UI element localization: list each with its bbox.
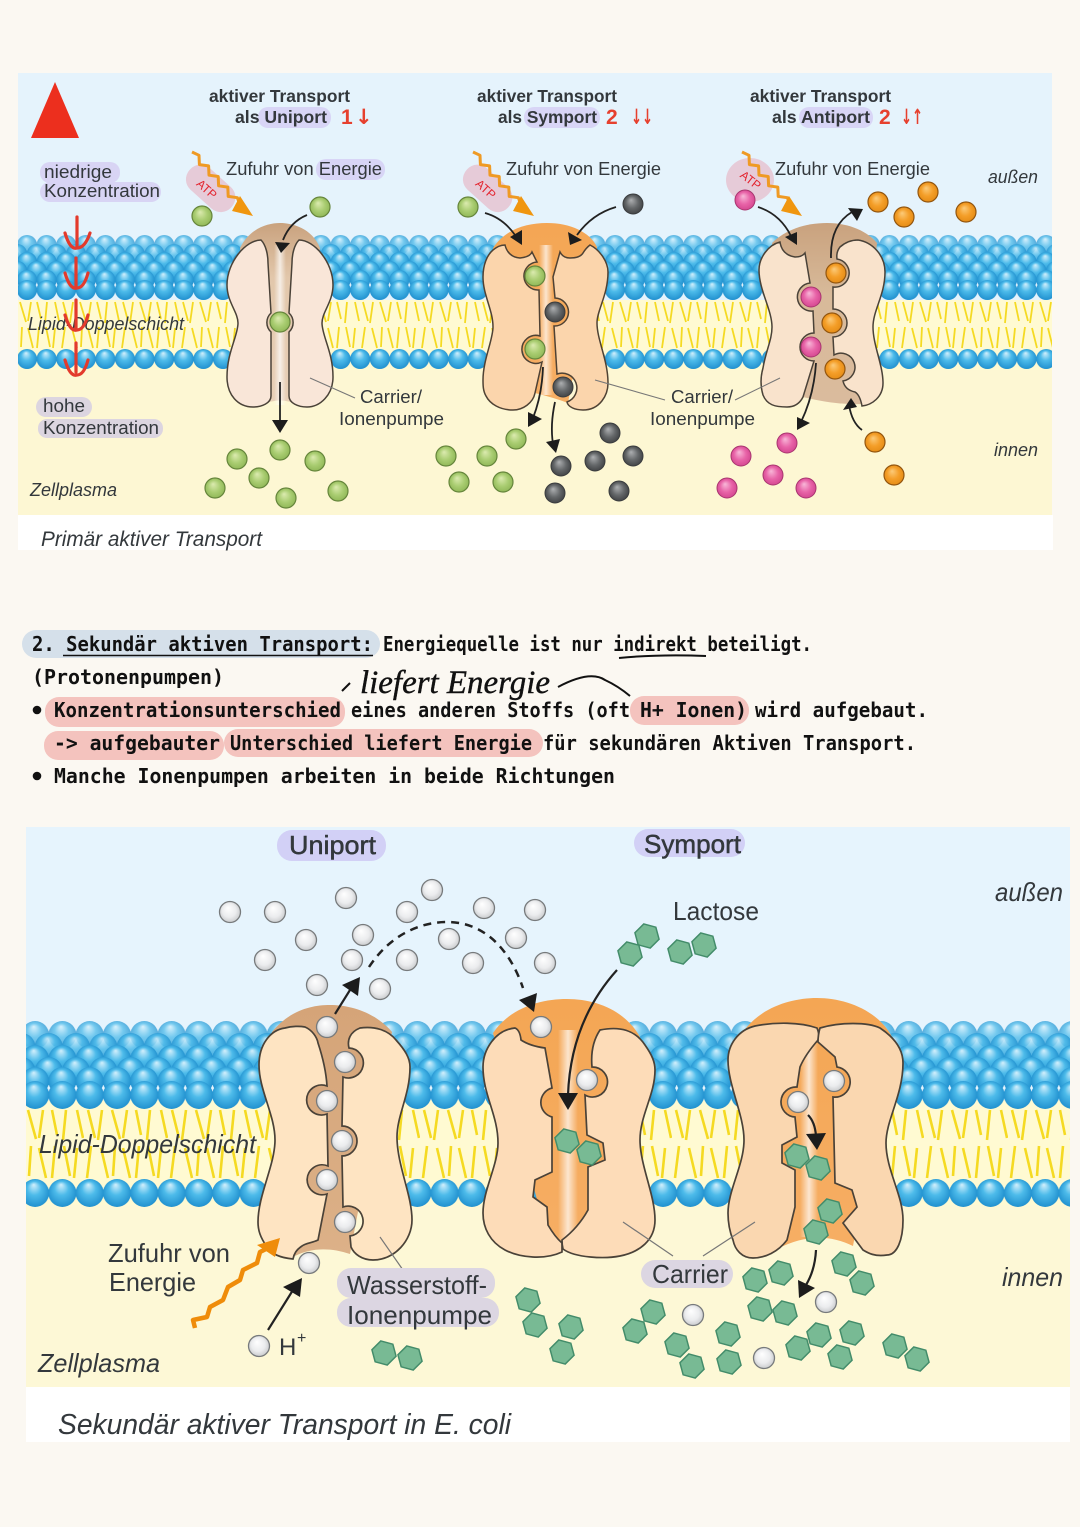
column 3 heading: antiport: als Antiport <box>772 107 870 127</box>
lipid bilayer <box>0 1020 1080 1208</box>
icon: energy squiggle <box>193 1238 280 1328</box>
label: hydrogen ion pump: Ionenpumpe <box>347 1300 492 1330</box>
column 2 heading: symport: 2 <box>606 106 618 129</box>
text: low concentration: niedrige <box>44 162 112 182</box>
label: energy supply 2: Zufuhr von Energie <box>506 159 661 179</box>
label: carrier 2: Ionenpumpe <box>650 409 755 429</box>
extracellular background <box>18 73 1052 303</box>
label: inside: innen <box>994 440 1038 460</box>
text: low concentration: Konzentration <box>44 181 160 201</box>
proton label: + <box>297 1330 306 1347</box>
protein: uniport carrier <box>227 223 333 407</box>
caption background: secondary transport <box>26 1387 1070 1442</box>
icon: ATP energy 1 <box>180 152 253 218</box>
panel: secondary active transport <box>0 827 1080 1442</box>
bullet 1 continuation <box>54 731 916 755</box>
column 1 heading: uniport: aktiver Transport <box>209 86 350 106</box>
bullet 1: wird aufgebaut. <box>755 698 928 722</box>
lactose and protons inside <box>369 1250 932 1380</box>
label: lipid bilayer: Lipid-Doppelschicht <box>28 314 185 334</box>
bullet 1 continuation: für sekundären Aktiven Transport. <box>543 731 916 755</box>
column 3 heading: antiport <box>750 86 923 129</box>
label: energy supply 3: Zufuhr von Energie <box>775 159 930 179</box>
text: high concentration: hohe <box>43 396 85 416</box>
bullet 1 <box>33 698 928 722</box>
label: energy supply: Energie <box>109 1267 196 1297</box>
text block: secondary transport notes <box>22 630 928 788</box>
proton label <box>248 1330 306 1361</box>
column 2 heading: symport: aktiver Transport <box>477 86 617 106</box>
molecules: uniport <box>192 197 348 508</box>
label: lactose: Lactose <box>673 896 759 926</box>
heading: uniport: Uniport <box>289 830 377 860</box>
protein: symport carrier open inward <box>728 998 903 1258</box>
label: energy supply <box>108 1238 230 1297</box>
membrane core background <box>26 1100 1070 1205</box>
bullet 1 continuation: Unterschied liefert Energie <box>230 731 532 755</box>
molecules: symport <box>436 194 643 503</box>
icon: ATP energy 2: ATP <box>473 177 499 202</box>
heading line: 2. Sekundär aktiven Transport: <box>32 632 373 656</box>
icon: ATP energy 3: ATP <box>737 168 764 193</box>
membrane core background <box>18 300 1052 370</box>
label: cytoplasm: Zellplasma <box>29 480 117 500</box>
extracellular background <box>26 827 1070 1107</box>
column 3 heading: antiport: 2 <box>879 106 891 129</box>
cytoplasm background <box>26 1205 1070 1387</box>
column 1 heading: uniport: als Uniport <box>235 107 327 127</box>
label: carrier 1: Ionenpumpe <box>339 409 444 429</box>
molecules: antiport <box>717 182 976 498</box>
column 1 heading: uniport: 1 <box>341 106 353 129</box>
label: outside: außen <box>995 877 1063 907</box>
icon: ATP energy 3 <box>726 152 802 216</box>
column 3 heading: antiport: aktiver Transport <box>750 86 891 106</box>
caption: secondary transport: Sekundär aktiver Transport in E. coli <box>58 1409 513 1441</box>
bullet 2: Manche Ionenpumpen arbeiten in beide Richtungen <box>54 764 615 788</box>
column 2 heading: symport: als Symport <box>498 107 597 127</box>
panel: primary active transport <box>0 73 1080 551</box>
handwritten note: liefert Energie <box>342 665 630 701</box>
label pills: concentration <box>36 162 163 438</box>
text: low concentration <box>44 162 160 201</box>
label: carrier 2 <box>650 387 755 429</box>
cytoplasm background <box>18 370 1052 515</box>
bullet 1 continuation: -> aufgebauter <box>54 731 220 755</box>
protein: symport carrier <box>483 223 608 410</box>
protein: hydrogen ion pump <box>258 1005 412 1274</box>
column 1 heading: uniport: ↓ <box>355 105 373 129</box>
text: high concentration <box>43 396 159 438</box>
leader lines: carrier <box>310 378 780 400</box>
heading line: Energiequelle ist nur indirekt beteiligt. <box>383 632 812 656</box>
column 1 heading: uniport <box>209 86 373 129</box>
heading: symport: Symport <box>644 829 742 859</box>
label: carrier: Carrier <box>652 1259 728 1289</box>
column 2 heading: symport <box>477 86 653 129</box>
bullet 1: eines anderen Stoffs (oft <box>351 698 630 722</box>
protein: uniport-symport carrier open outward <box>483 999 655 1258</box>
icon: ATP energy 1: ATP <box>194 177 220 202</box>
caption: primary transport: Primär aktiver Transport <box>41 528 263 551</box>
proton label: H <box>279 1334 296 1361</box>
icon: ATP energy 2 <box>457 152 534 218</box>
protein: antiport carrier <box>759 223 885 407</box>
label: cytoplasm: Zellplasma <box>37 1348 160 1378</box>
handwritten note: liefert Energie: liefert Energie <box>360 665 550 701</box>
red arrows: concentration gradient <box>65 217 90 375</box>
caption background: primary transport <box>18 515 1053 550</box>
column 3 heading: antiport: ↓↑ <box>901 105 923 129</box>
label: inside: innen <box>1002 1262 1063 1292</box>
label: energy supply: Zufuhr von <box>108 1238 230 1268</box>
proton pumps note: (Protonenpumpen) <box>32 665 224 689</box>
label: outside: außen <box>988 167 1038 187</box>
arrows: proton and lactose paths <box>268 922 826 1330</box>
arrows: transport directions <box>272 207 863 453</box>
label: energy supply 1: Zufuhr von Energie <box>226 159 382 179</box>
label: hydrogen ion pump <box>337 1268 499 1330</box>
icon: red triangle <box>31 82 79 138</box>
protons outside <box>220 880 556 1000</box>
lactose outside <box>615 922 719 968</box>
column 2 heading: symport: ↓↓ <box>631 105 653 129</box>
highlight pills <box>22 630 749 760</box>
bullet 1: H+ Ionen) <box>640 698 747 722</box>
leader lines: pump and carrier <box>380 1222 755 1270</box>
label: hydrogen ion pump: Wasserstoff- <box>347 1270 487 1300</box>
label: carrier 1 <box>339 387 444 429</box>
label: carrier 2: Carrier/ <box>671 387 733 407</box>
text: high concentration: Konzentration <box>43 418 159 438</box>
label: carrier 1: Carrier/ <box>360 387 422 407</box>
bullet 1: Konzentrationsunterschied <box>54 698 341 722</box>
label: lipid bilayer: Lipid-Doppelschicht <box>39 1129 258 1159</box>
heading line <box>32 632 812 658</box>
lipid bilayer <box>0 234 1080 370</box>
